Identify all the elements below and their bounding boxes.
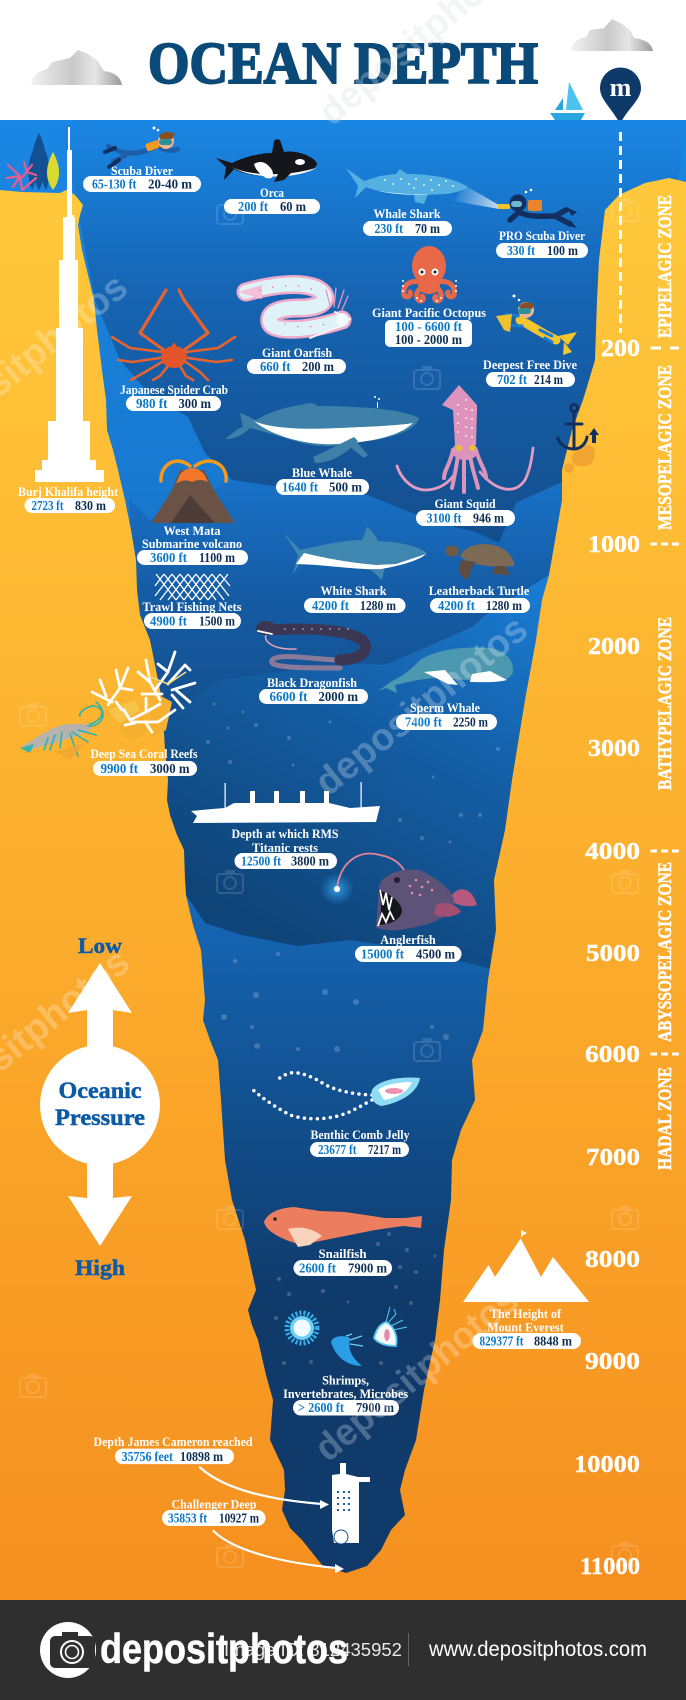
label: Depth at which RMS Titanic rests: 3800 m [291,854,330,868]
depth scale: 10000 [574,1452,640,1478]
icon: anglerfish [321,854,477,930]
label: The Height of Mount Everest [472,1306,581,1349]
zone labels: BATHYPELAGIC ZONE [655,617,676,790]
label: Depth at which RMS Titanic rests: 12500 ft [241,854,281,868]
zone boundary dashes [650,348,679,1054]
label: Shrimps, Invertebrates, Microbes: Shrimps, [322,1372,369,1388]
icon: torch beam [454,185,499,209]
label: Challenger Deep [162,1496,266,1526]
label: Blue Whale [276,465,369,495]
icon: trawl fishing net [155,574,230,600]
depth line [619,132,622,333]
icon: top-left reef [7,133,59,190]
watermarks: depositphotos [307,1279,527,1470]
label: The Height of Mount Everest: 8848 m [534,1334,573,1348]
label: Deepest Free Dive [483,357,577,387]
label: Orca [224,185,320,214]
label: Sperm Whale: 7400 ft [405,714,442,730]
label: White Shark [304,583,406,613]
label: Giant Pacific Octopus: Giant Pacific Octopus [372,305,486,320]
pressure caption: Pressure [55,1105,145,1130]
label: Scuba Diver: 20-40 m [148,176,193,192]
icon: giant oarfish [238,285,350,338]
icon: benthic comb jelly [251,1073,420,1119]
label: Trawl Fishing Nets: 1500 m [199,614,236,628]
label: The Height of Mount Everest: 829377 ft [480,1334,524,1348]
label: Depth at which RMS Titanic rests: Depth at which RMS [232,826,338,841]
label: Benthic Comb Jelly: 23677 ft [318,1142,357,1157]
depth scale: 8000 [585,1247,640,1273]
label: Snailfish: 2600 ft [299,1260,336,1276]
label: Depth James Cameron reached [94,1434,253,1464]
label: Trawl Fishing Nets: Trawl Fishing Nets [142,599,242,614]
watermarks: depositphotos [307,608,536,804]
icon: submersible [332,1463,370,1544]
label: Sperm Whale: 2250 m [453,714,489,730]
footer bar [0,1600,686,1700]
label: West Mata Submarine volcano: West Mata [164,523,221,538]
icon: anchor with coral [558,404,599,473]
label: Depth at which RMS Titanic rests: Titanic rests [252,840,318,855]
label: Black Dragonfish: 2000 m [318,689,359,704]
zone labels: EPIPELAGIC ZONE [655,195,676,338]
icon: snailfish [264,1207,422,1247]
zone labels [655,195,676,1170]
label: Depth at which RMS Titanic rests [232,826,338,869]
depth scale: 4000 [585,839,640,865]
label: Leatherback Turtle: 1280 m [486,598,523,613]
zone labels: MESOPELAGIC ZONE [655,365,676,530]
label: West Mata Submarine volcano: Submarine volcano [142,536,242,551]
label: Leatherback Turtle: Leatherback Turtle [429,583,530,598]
label: White Shark: 4200 ft [312,598,349,613]
icon: cyan shrimp [331,1334,363,1366]
label: Burj Khalifa height [18,484,119,513]
label: Scuba Diver [83,163,201,192]
footer logo: depositphotos [100,1625,348,1672]
icon: metres pin [600,67,641,124]
label: West Mata Submarine volcano: 3600 ft [150,550,187,565]
label: Blue Whale: 1640 ft [282,480,318,494]
icon: giant squid [397,385,533,492]
label: PRO Scuba Diver [496,228,588,258]
label: Deepest Free Dive: 702 ft [497,372,527,387]
depth scale: 6000 [585,1042,640,1068]
label: Japanese Spider Crab: 300 m [178,396,212,411]
watermarks [0,0,537,1470]
depth scale: 9000 [585,1349,640,1375]
label: Giant Oarfish: 200 m [302,359,335,374]
oceanic pressure diagram [40,933,160,1280]
icon: black dragonfish [256,621,366,668]
label: Orca: 60 m [280,199,307,214]
icon: orca [216,139,317,182]
icon: west mata volcano [151,461,235,523]
pressure caption [55,1078,145,1130]
icon: deep sea coral and shrimp [20,652,195,760]
label: Snailfish: Snailfish [318,1246,367,1261]
label: Scuba Diver: 65-130 ft [92,176,137,192]
label: Shrimps, Invertebrates, Microbes: > 2600 ft [298,1400,344,1415]
label: The Height of Mount Everest: The Height of [490,1306,562,1321]
icon: Burj Khalifa [35,127,104,482]
label: Black Dragonfish: Black Dragonfish [267,675,358,690]
footer url: www.depositphotos.com [428,1638,647,1661]
label: Orca: Orca [260,185,284,200]
label: Anglerfish: 4500 m [416,946,456,962]
label: Trawl Fishing Nets: 4900 ft [150,614,187,628]
label: Giant Squid: 3100 ft [426,510,462,526]
label: Giant Squid: Giant Squid [434,496,496,511]
icon: deepest free diver [496,294,577,355]
label: Burj Khalifa height: 830 m [75,498,107,513]
label: Snailfish: 7900 m [348,1260,388,1276]
label: West Mata Submarine volcano [137,523,248,565]
label: Japanese Spider Crab: 980 ft [136,396,168,411]
pressure label: High: High [75,1255,125,1280]
label: Leatherback Turtle: 4200 ft [438,598,475,613]
label: Black Dragonfish [259,675,368,704]
icon: blue whale [225,396,419,463]
label: Challenger Deep: 35853 ft [168,1510,207,1526]
label: Snailfish [294,1246,392,1276]
cloud right [571,19,653,51]
depth scale [574,336,640,1580]
icon: sperm whale [378,648,513,693]
zone labels: HADAL ZONE [655,1067,676,1170]
label: Shrimps, Invertebrates, Microbes [283,1372,408,1416]
icon: Titanic [191,782,380,823]
zone labels: ABYSSOPELAGIC ZONE [655,862,676,1042]
label: Deepest Free Dive: 214 m [534,372,564,387]
label: White Shark: 1280 m [360,598,397,613]
footer logo [40,1622,348,1678]
depth scale: 200 [601,336,640,362]
label: Benthic Comb Jelly [310,1127,410,1157]
arrow: down [68,1150,132,1246]
cloud left [31,50,122,85]
label: Giant Oarfish: Giant Oarfish [262,345,333,360]
label: Depth James Cameron reached: 35756 feet [122,1449,173,1464]
label: Orca: 200 ft [238,199,268,214]
icon: japanese spider crab [112,290,235,380]
label: Challenger Deep: Challenger Deep [172,1496,256,1512]
label: Giant Oarfish: 660 ft [260,359,291,374]
arrow: Challenger Deep [214,1531,344,1573]
label: Whale Shark [363,206,452,236]
label: Leatherback Turtle [429,583,530,613]
depth scale: 11000 [580,1554,640,1580]
label: Giant Oarfish [247,345,346,374]
pressure circle [40,1045,160,1165]
label: PRO Scuba Diver: 100 m [547,243,579,258]
label: Depth James Cameron reached: 10898 m [180,1449,224,1464]
label: Blue Whale: Blue Whale [292,465,352,480]
label: West Mata Submarine volcano: 1100 m [199,550,236,565]
label: The Height of Mount Everest: Mount Everest [487,1320,564,1334]
label: Anglerfish: 15000 ft [361,946,404,962]
icon: white shark [283,527,427,580]
label: Deepest Free Dive: Deepest Free Dive [483,357,577,372]
label: Anglerfish [355,932,462,962]
image id: Image ID: 312435952 [224,1639,402,1660]
title: OCEAN DEPTH [148,30,538,96]
label: Japanese Spider Crab [120,382,228,411]
label: Whale Shark: Whale Shark [374,206,441,221]
label: Giant Pacific Octopus: 100 - 6600 ft [395,319,462,334]
label: Shrimps, Invertebrates, Microbes: Invertebrates, Microbes [283,1386,408,1401]
label: Benthic Comb Jelly: 7217 m [368,1142,402,1157]
arrow: up [68,963,132,1060]
icon: mount everest [463,1230,589,1302]
icon: leatherback turtle [445,544,514,580]
label: Burj Khalifa height: Burj Khalifa height [18,484,119,499]
icon: giant pacific octopus [403,246,456,303]
label: Deep Sea Coral Reefs: 9900 ft [101,761,138,776]
pressure caption: Oceanic [58,1078,142,1103]
label: Giant Pacific Octopus: 100 - 2000 m [395,332,463,347]
icon: whale shark [346,168,468,204]
label: Japanese Spider Crab: Japanese Spider Crab [120,382,228,397]
label: PRO Scuba Diver: 330 ft [507,243,535,258]
label: Benthic Comb Jelly: Benthic Comb Jelly [310,1127,410,1142]
header background [0,0,686,120]
icon: cyan jellyfish [374,1307,407,1346]
label: Giant Squid: 946 m [473,510,505,526]
label: Giant Squid [416,496,515,526]
label: Sperm Whale: Sperm Whale [410,700,480,715]
label: Trawl Fishing Nets [142,599,242,629]
label: Shrimps, Invertebrates, Microbes: 7900 m [356,1400,395,1415]
label: Burj Khalifa height: 2723 ft [32,498,64,513]
label: Whale Shark: 230 ft [374,221,403,236]
label: Depth James Cameron reached: Depth James Cameron reached [94,1434,253,1449]
pressure label: Low: Low [78,933,122,958]
depth scale: 3000 [588,736,640,762]
icon: metres pin: m [610,73,632,102]
label: Whale Shark: 70 m [415,221,441,236]
label: Blue Whale: 500 m [329,480,363,494]
depth scale: 7000 [586,1145,640,1171]
label: Anglerfish: Anglerfish [380,932,436,947]
depth scale: 1000 [588,532,640,558]
icon: microbe [287,1313,317,1343]
arrow: Cameron depth [200,1468,329,1509]
icon: pro scuba diver [498,189,577,228]
drifting particles [206,702,500,1365]
label: Giant Pacific Octopus [372,305,486,347]
label: PRO Scuba Diver: PRO Scuba Diver [499,228,585,243]
label: Deep Sea Coral Reefs: 3000 m [150,761,190,776]
label: Deep Sea Coral Reefs [90,746,198,776]
icon: scuba diver [105,126,178,167]
label: Black Dragonfish: 6600 ft [270,689,308,704]
depth scale: 2000 [588,634,640,660]
label: Deep Sea Coral Reefs: Deep Sea Coral Reefs [90,746,198,761]
label: White Shark: White Shark [320,583,387,598]
label: Scuba Diver: Scuba Diver [111,163,173,178]
label: Challenger Deep: 10927 m [219,1510,260,1526]
icon: sailboat [550,82,585,120]
label: Sperm Whale [396,700,497,730]
depth scale: 5000 [586,941,640,967]
